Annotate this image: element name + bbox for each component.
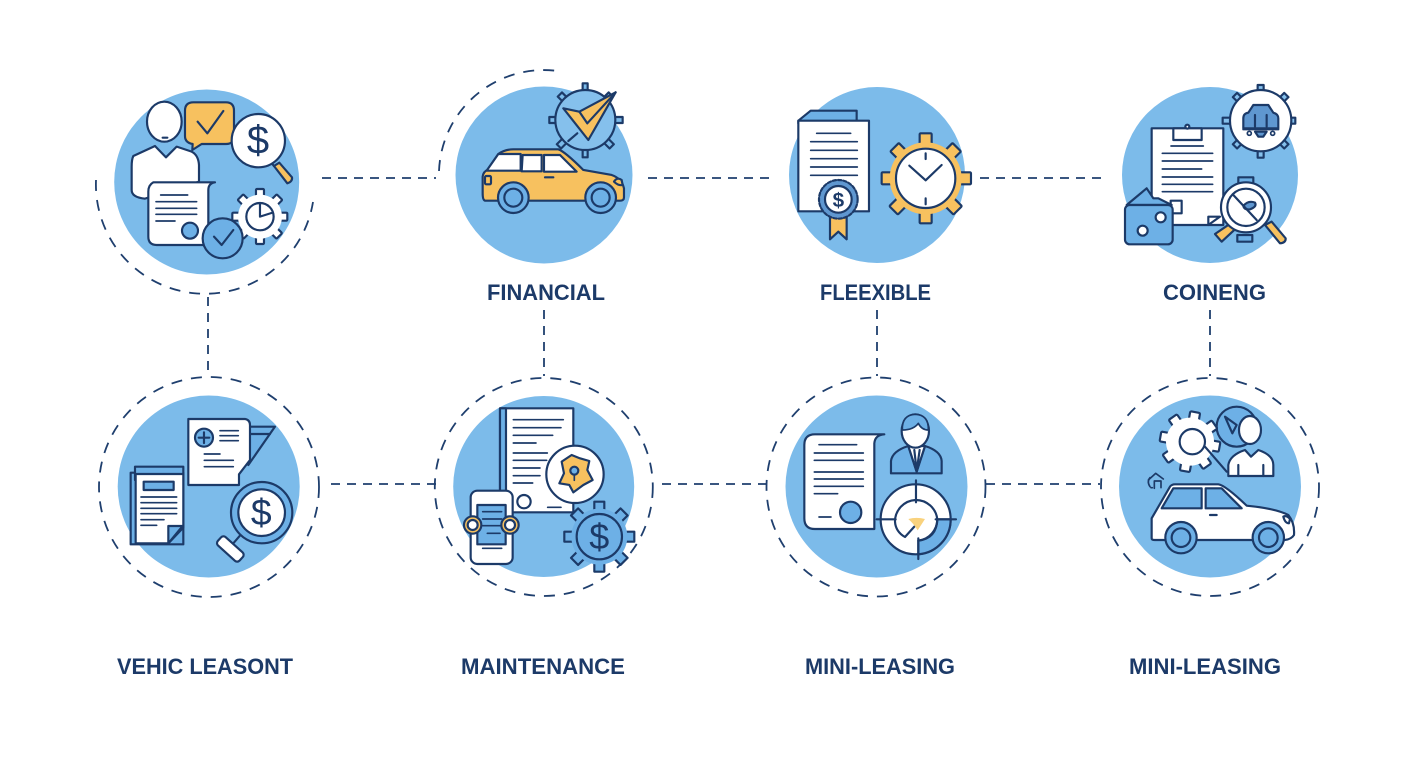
blue circle 3 [789, 87, 965, 263]
connector lines [208, 178, 1210, 484]
panel: top row item 4 [1122, 85, 1298, 305]
label: mini-leasing second: MINI-LEASING [1129, 654, 1281, 679]
icon: clipboard, wallet, magnifier, car gear [1125, 85, 1295, 244]
icon: contract, person, target [804, 414, 956, 559]
dashed ring 5 [99, 377, 319, 597]
blue circle 7 [786, 396, 968, 578]
blue circle 1 [114, 90, 299, 274]
icon: certificate and clock gear: $ [833, 189, 845, 212]
icon: person, contract, finance: $ [247, 118, 269, 162]
icon: gear, advisor and car [1148, 407, 1294, 553]
blue circle 5 [118, 396, 300, 578]
icon: manual, phone, gear with dollar [464, 408, 634, 572]
label: coineng: COINENG [1163, 280, 1266, 305]
label: financial: FINANCIAL [487, 280, 605, 305]
blue circle 8 [1119, 396, 1301, 578]
icon: documents and dollar magnifier: $ [251, 491, 272, 533]
panel: bottom row item 3 mini-leasing [766, 378, 986, 679]
icon: manual, phone, gear with dollar: $ [589, 516, 609, 557]
icon: documents and dollar magnifier [131, 419, 292, 563]
label: flexible: FLEEXIBLE [820, 280, 931, 305]
icon: car with check gear [483, 83, 624, 213]
icon: certificate and clock gear [798, 111, 971, 239]
panel: top row item 3 flexible [789, 87, 971, 305]
dashed ring 8 [1101, 378, 1319, 596]
panel: bottom row item 2 maintenance [435, 378, 653, 679]
panel: top row item 2 financial [439, 70, 632, 305]
dashed arc 2 [439, 70, 558, 171]
dashed arc 1 [96, 180, 313, 294]
label: vehicle leasing: VEHIC LEASONT [117, 654, 294, 679]
dashed ring 6 [435, 378, 653, 596]
dashed ring 7 [766, 378, 986, 596]
blue circle 2 [456, 86, 632, 264]
label: mini-leasing: MINI-LEASING [805, 654, 955, 679]
panel: bottom row item 1 vehicle leasing [99, 377, 319, 679]
panel: top row item 1 [96, 90, 313, 294]
blue circle 6 [453, 396, 634, 577]
icon: person, contract, finance [132, 102, 292, 258]
label: maintenance: MAINTENANCE [461, 654, 625, 679]
blue circle 4 [1122, 87, 1298, 263]
panel: bottom row item 4 mini-leasing [1101, 378, 1319, 679]
